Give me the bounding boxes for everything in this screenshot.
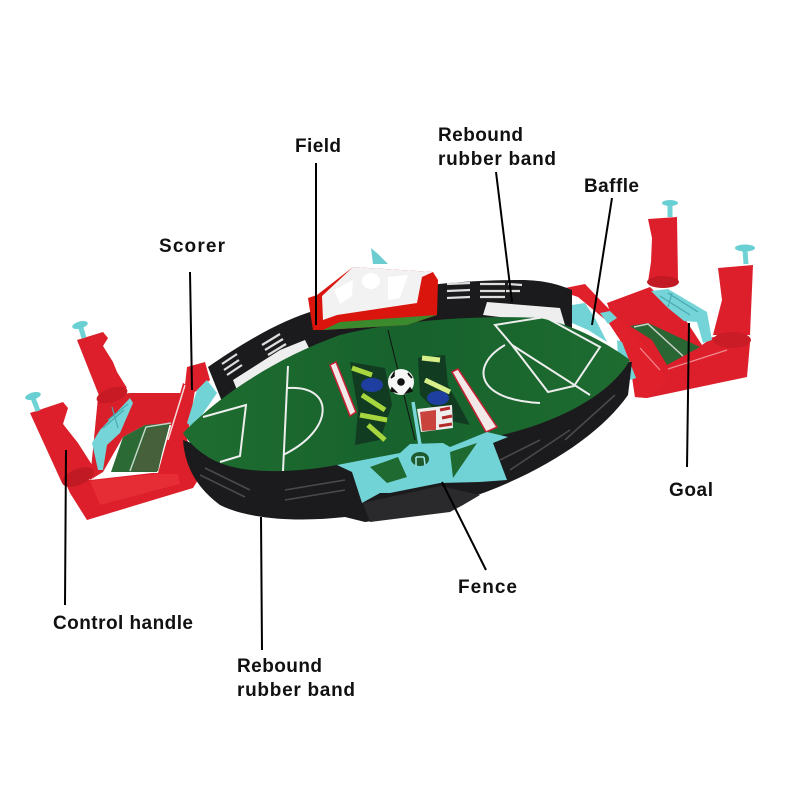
- right arc: [483, 345, 590, 403]
- line: rebound band bottom: [261, 517, 262, 650]
- black back wall: [208, 280, 572, 404]
- labels: [53, 125, 713, 701]
- front left handle: [30, 402, 94, 483]
- label: rebound bottom line 2: rubber band: [237, 680, 355, 701]
- rear left handle: [77, 332, 127, 398]
- line: field: [315, 163, 317, 325]
- right unit base: [607, 287, 750, 398]
- badges: [361, 378, 383, 392]
- left penalty box: [203, 405, 246, 462]
- line: baffle: [592, 198, 612, 325]
- left centre line and arc: [283, 366, 323, 471]
- label: fence: Fence: [458, 577, 517, 598]
- label: rebound bottom line 1: Rebound: [237, 656, 322, 677]
- label: rebound top line 2: rubber band: [438, 149, 556, 170]
- black front wall: [183, 362, 632, 522]
- label: goal: Goal: [669, 480, 713, 501]
- logo backing: [350, 362, 392, 445]
- rear goal: [308, 248, 438, 330]
- line: goal: [687, 323, 689, 467]
- line: control handle: [65, 450, 66, 605]
- back wall rubber band: [222, 283, 565, 390]
- front pedestal: [363, 486, 480, 522]
- right net: [651, 289, 712, 343]
- right penalty box: [495, 317, 600, 392]
- left unit back wall: [90, 393, 180, 480]
- left net: [92, 398, 133, 470]
- left plungers: [80, 325, 84, 338]
- ball: [388, 369, 414, 395]
- left pit: [111, 423, 170, 472]
- left corner pillar: [185, 362, 210, 392]
- label: scorer: Scorer: [159, 236, 226, 257]
- field: [183, 317, 630, 471]
- front cyan fence: [337, 432, 508, 503]
- right pit: [630, 323, 700, 365]
- label: field: Field: [295, 136, 341, 157]
- right front handle: [713, 265, 753, 335]
- seam line: [388, 330, 415, 440]
- left cyan baffle: [187, 380, 217, 428]
- right rear handle: [648, 217, 678, 282]
- leader lines: [65, 163, 689, 650]
- right red control unit: [557, 200, 755, 398]
- left red control unit: [24, 320, 217, 520]
- games begin tags: [330, 362, 356, 416]
- label: control handle: Control handle: [53, 613, 193, 634]
- line: fence: [442, 482, 486, 570]
- right cyan baffle: [572, 303, 607, 342]
- front wall slots: [200, 395, 615, 500]
- right plungers: [668, 204, 672, 217]
- line: scorer: [190, 272, 192, 390]
- right red strip: [557, 284, 667, 398]
- flag: [417, 405, 453, 432]
- left unit base: [63, 383, 198, 520]
- line: rebound band top: [496, 172, 512, 302]
- soccer logo: [330, 355, 497, 445]
- label: rebound top line 1: Rebound: [438, 125, 523, 146]
- label: baffle: Baffle: [584, 176, 639, 197]
